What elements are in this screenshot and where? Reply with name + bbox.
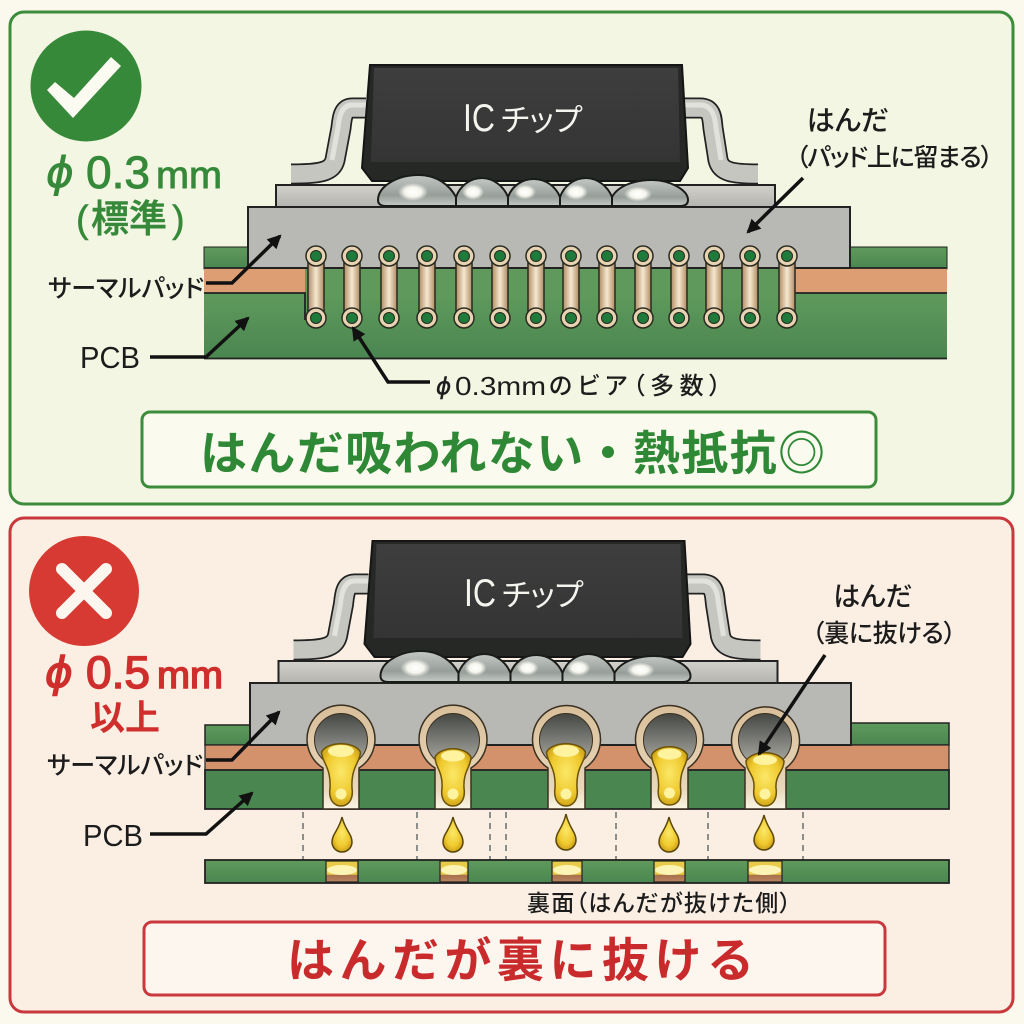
via: large hole 1	[307, 705, 375, 809]
arrow: solder	[748, 178, 803, 232]
heading: phi 0.5mm: 0.5	[86, 647, 150, 698]
panel: oversized via (red)	[10, 518, 1013, 1012]
arrow: vias	[353, 328, 430, 382]
PCB cross-section: top	[204, 247, 947, 358]
heading: phi 0.3mm: mm	[156, 155, 222, 197]
text: IC chip: チップ	[502, 578, 584, 613]
text: IC chip: IC	[464, 572, 496, 615]
text: standard: 標準	[91, 199, 167, 241]
IC package: top	[276, 65, 775, 207]
arrow: solder	[759, 655, 825, 754]
dashed guide lines	[303, 812, 803, 860]
heading: phi 0.5mm: ϕ	[45, 648, 73, 697]
icon: check mark	[30, 30, 142, 142]
label: solder goes through: はんだ	[833, 582, 913, 612]
via: large hole 5	[732, 707, 800, 809]
label: solder stays on pad: はんだ	[807, 105, 889, 136]
panel: standard via (green)	[10, 12, 1013, 504]
text: IC chip: IC	[463, 97, 495, 140]
callout: result bad	[144, 922, 885, 995]
via: large hole 3	[533, 705, 601, 809]
label: PCB: PCB	[83, 818, 143, 853]
thermal pad block	[250, 683, 851, 745]
back side strip	[205, 860, 949, 883]
solder drops	[332, 814, 774, 852]
label: solder goes through: （裏に抜ける）	[812, 620, 956, 648]
label: vias	[436, 371, 721, 401]
arrow: PCB	[150, 793, 252, 834]
label: back side: 裏面（はんだが抜けた側）	[527, 890, 791, 916]
via: large hole 4	[636, 705, 704, 809]
arrow: thermal pad	[206, 236, 280, 283]
via: large hole 2	[419, 705, 487, 809]
label: thermal pad: サーマルパッド	[48, 275, 204, 303]
heading: phi 0.3mm: 0.3	[86, 147, 150, 198]
thermal pad block	[248, 207, 850, 268]
callout: result bad: はんだが裏に抜ける	[287, 934, 754, 987]
icon: cross mark	[29, 536, 139, 646]
heading: phi 0.5mm: mm	[157, 655, 223, 697]
arrow: PCB	[150, 318, 248, 357]
callout: result good	[142, 412, 876, 487]
IC package: bottom	[278, 541, 778, 683]
callout: result good: はんだ吸われない・熱抵抗◎	[200, 427, 825, 480]
label: vias: 0.3mm	[455, 371, 546, 401]
heading: phi 0.5mm	[45, 647, 223, 698]
arrow: thermal pad	[206, 712, 279, 760]
heading: phi 0.3mm: ϕ	[46, 148, 74, 197]
text: or more: 以上	[90, 699, 160, 738]
label: vias: のビア（多数）	[549, 373, 721, 400]
label: solder goes through	[812, 582, 956, 648]
label: solder stays on pad	[796, 105, 993, 172]
text: standard: )	[172, 199, 185, 241]
label: vias: ϕ	[436, 374, 451, 400]
text: IC chip: チップ	[501, 103, 583, 138]
via row: phi 0.3mm	[306, 246, 797, 328]
PCB cross-section: bottom	[205, 723, 949, 809]
label: PCB: PCB	[80, 340, 140, 375]
heading: phi 0.3mm	[46, 147, 222, 198]
label: solder stays on pad: （パッド上に留まる）	[796, 144, 993, 172]
label: thermal pad: サーマルパッド	[47, 752, 203, 780]
text: standard: (	[76, 199, 89, 241]
